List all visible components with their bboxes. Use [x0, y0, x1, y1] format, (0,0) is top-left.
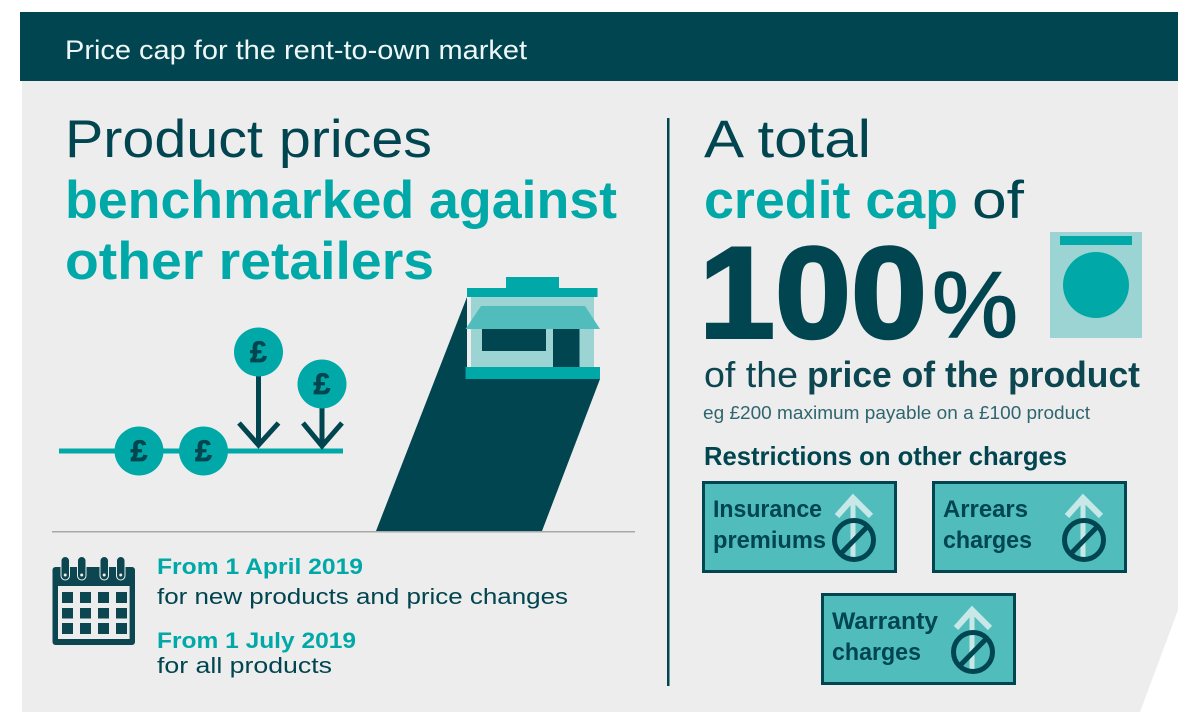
heading: product prices: [65, 110, 617, 291]
box: arrears charges: Arrears: [943, 496, 1028, 523]
icon: shop with shadow: [376, 277, 600, 531]
big number: 100%: %: [932, 252, 1018, 357]
box: arrears charges: charges: [943, 527, 1032, 554]
text: dates: for all products: [157, 653, 332, 678]
heading: restrictions: Restrictions on other charges: [704, 441, 1067, 471]
text: of the price of the product: of the: [704, 354, 798, 395]
icon: calendar: [52, 556, 135, 645]
heading: total credit cap: credit cap: [704, 171, 958, 230]
box: warranty charges: Warranty: [832, 608, 939, 635]
divider: [667, 118, 670, 686]
text: dates: From 1 July 2019: [157, 628, 356, 653]
text: dates: [157, 554, 568, 678]
heading: total credit cap: [704, 110, 1024, 230]
big number: 100%: [699, 220, 1018, 366]
baseline rule: [52, 531, 635, 532]
box: warranty charges: charges: [832, 639, 921, 666]
box: insurance premiums: [704, 482, 896, 572]
chart: price benchmark coins: £: [250, 336, 267, 369]
box: insurance premiums: premiums: [713, 527, 826, 554]
text: of the price of the product: price of the product: [807, 354, 1140, 395]
box: arrears charges: [934, 482, 1126, 572]
text: dates: for new products and price changes: [157, 584, 568, 609]
big number: 100%: 100: [699, 220, 927, 366]
heading: product prices: other retailers: [65, 232, 434, 291]
header bar: [20, 12, 1178, 81]
heading: total credit cap: of: [972, 171, 1024, 230]
heading: product prices: benchmarked against: [65, 171, 617, 230]
box: insurance premiums: Insurance: [713, 496, 822, 523]
chart: price benchmark coins: [59, 328, 346, 476]
title: Price cap for the rent-to-own market: [65, 35, 528, 65]
icon: washing machine: [1050, 232, 1142, 338]
heading: product prices: Product prices: [65, 110, 432, 169]
text: example: eg £200 maximum payable on a £100 product: [703, 403, 1090, 423]
heading: total credit cap: A total: [704, 110, 871, 169]
chart: price benchmark coins: £: [314, 368, 331, 401]
text: dates: From 1 April 2019: [157, 554, 363, 579]
chart: price benchmark coins: £: [131, 435, 148, 468]
box: warranty charges: [822, 594, 1014, 684]
chart: price benchmark coins: £: [195, 435, 212, 468]
